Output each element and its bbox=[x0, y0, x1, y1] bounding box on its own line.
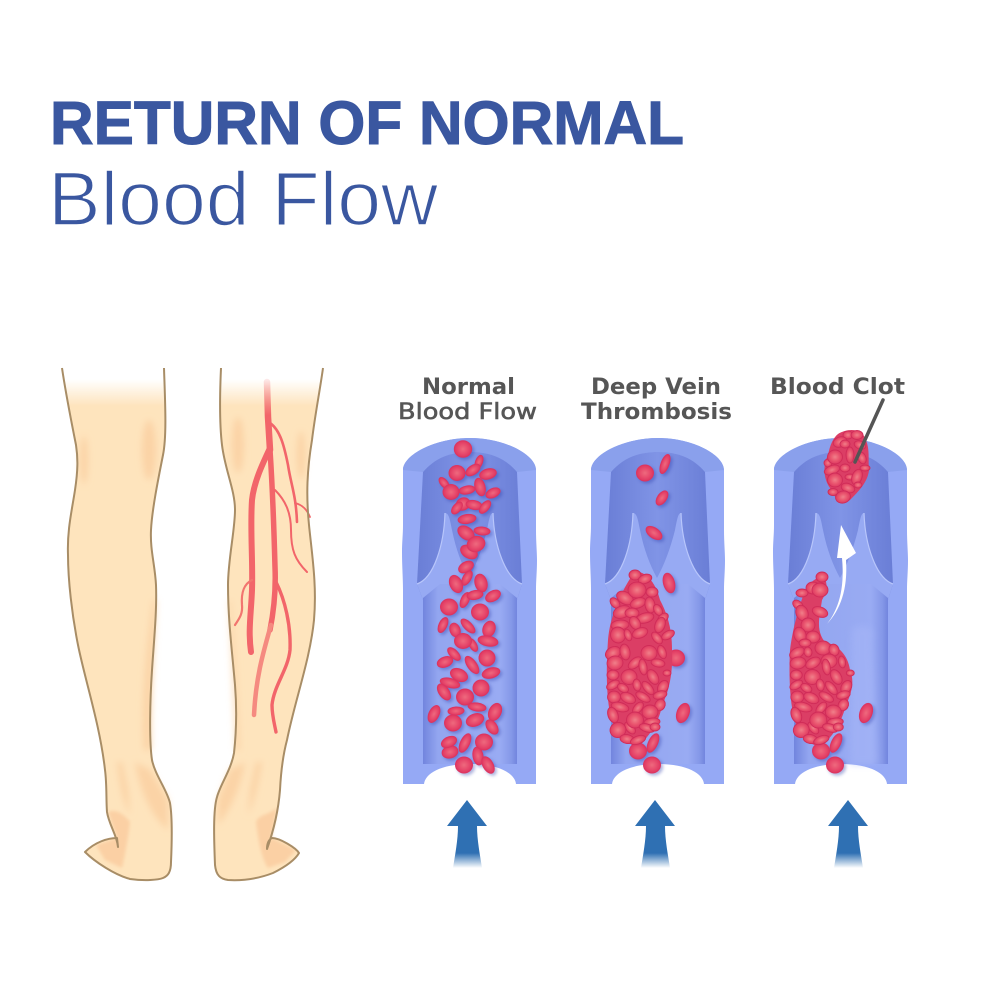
label: deep vein thrombosis bbox=[581, 375, 732, 425]
title: Blood Flow bbox=[48, 157, 439, 242]
thrombus: clumped cells bbox=[603, 570, 676, 746]
inflamed red veins bbox=[235, 382, 310, 732]
left leg: healthy bbox=[60, 368, 172, 880]
label: blood clot: Blood Clot bbox=[770, 375, 906, 400]
label: deep vein thrombosis: Thrombosis bbox=[581, 400, 732, 425]
vein: deep vein thrombosis bbox=[590, 438, 725, 784]
label: normal blood flow bbox=[398, 375, 537, 425]
title: RETURN OF NORMAL bbox=[50, 89, 684, 157]
label: normal blood flow: Blood Flow bbox=[398, 400, 537, 425]
arrow: flow direction, normal bbox=[447, 800, 487, 868]
red blood cells flowing freely bbox=[426, 441, 504, 775]
remaining thrombus bbox=[788, 572, 854, 746]
pale flow patch bbox=[850, 626, 878, 764]
detached blood clot bbox=[823, 430, 870, 505]
white curved arrow bbox=[827, 525, 856, 624]
vein: normal blood flow bbox=[402, 438, 537, 784]
pointer line to clot bbox=[855, 400, 883, 462]
arrow: flow direction, clot bbox=[828, 800, 868, 868]
label: normal blood flow: Normal bbox=[422, 375, 515, 400]
vein: blood clot breaking away bbox=[773, 430, 908, 784]
arrow: flow direction, thrombosis bbox=[635, 800, 675, 868]
title bbox=[48, 89, 684, 242]
label: deep vein thrombosis: Deep Vein bbox=[591, 375, 721, 400]
right leg: with inflamed veins bbox=[214, 368, 326, 880]
loose cells bbox=[812, 702, 875, 773]
loose red blood cells bbox=[630, 453, 692, 773]
